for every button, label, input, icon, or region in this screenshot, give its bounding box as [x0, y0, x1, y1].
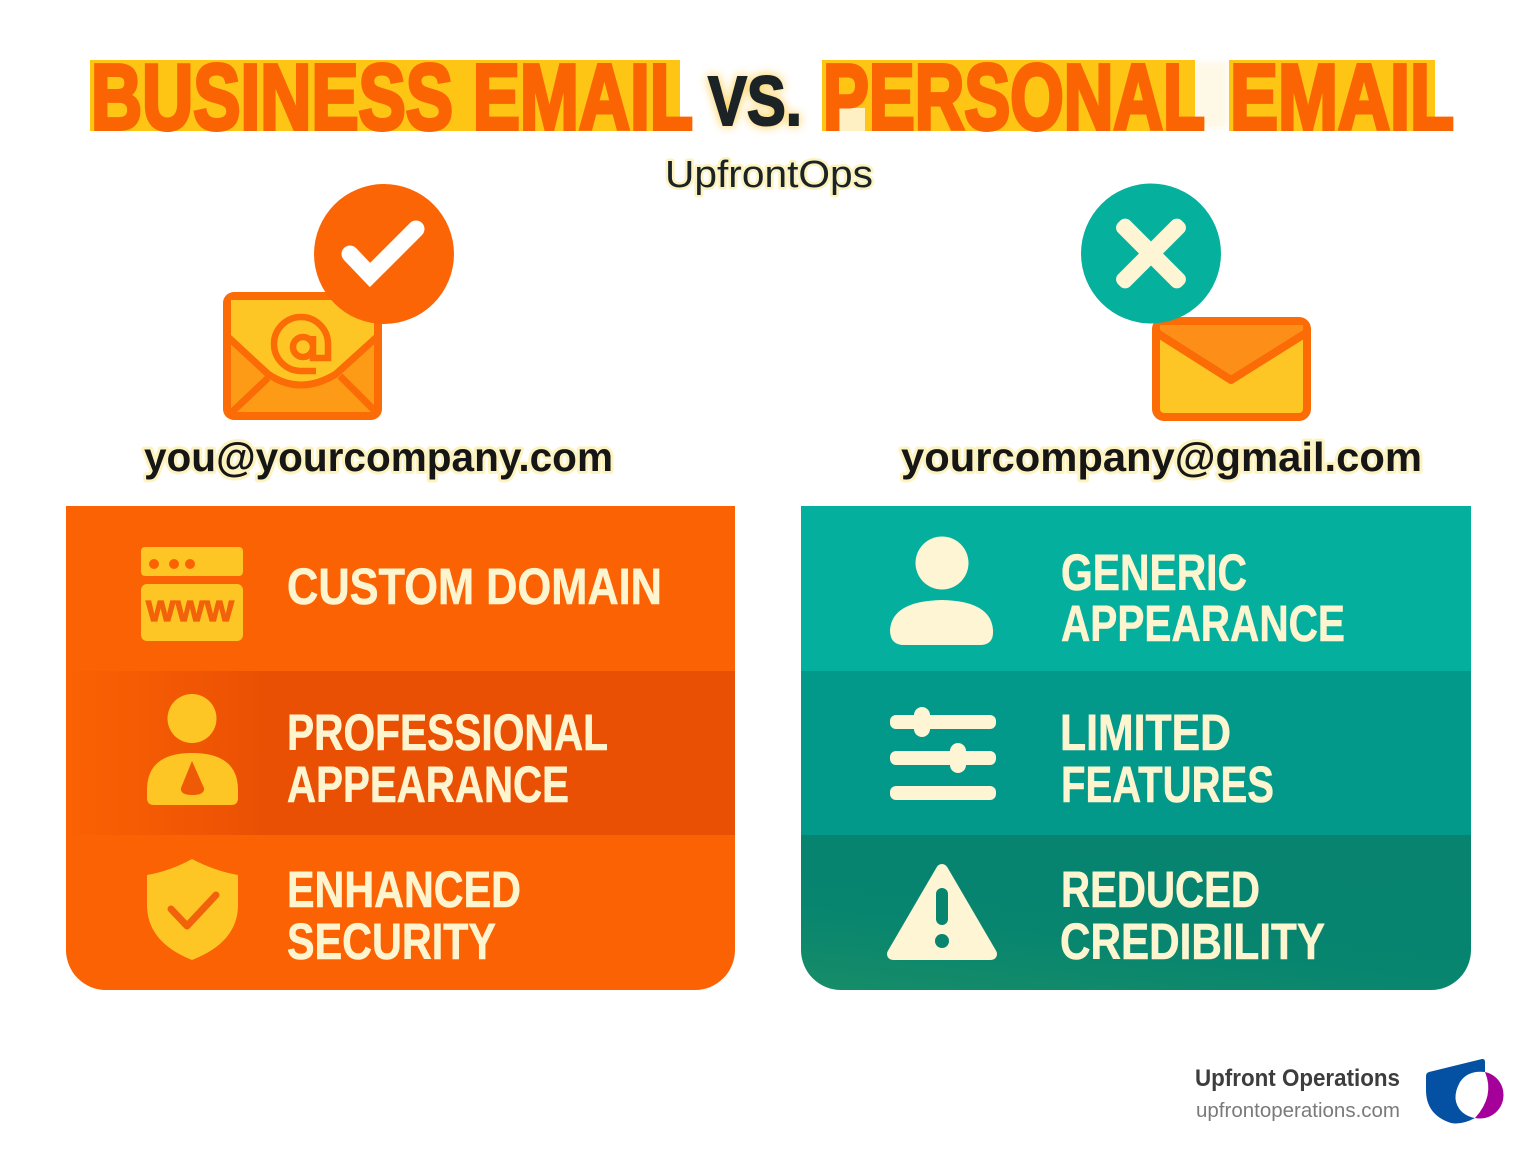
label: [1060, 704, 1274, 813]
label: APPEARANCE: [287, 756, 569, 813]
brand url: upfrontoperations.com: [1196, 1099, 1400, 1122]
label: CUSTOM DOMAIN: [287, 558, 662, 615]
title: personal email: PERSONAL: [823, 45, 1205, 149]
title: business email: BUSINESS EMAIL: [91, 45, 693, 149]
label: [1060, 861, 1325, 970]
footer: brand: [1195, 1059, 1504, 1123]
label: FEATURES: [1061, 756, 1274, 813]
panel background: [66, 506, 735, 990]
title: [90, 45, 1454, 149]
label: [287, 704, 608, 813]
brand name: Upfront Operations: [1195, 1065, 1400, 1092]
icon: professional person: [147, 694, 238, 805]
row: professional appearance: [147, 694, 608, 813]
label: APPEARANCE: [1061, 595, 1345, 652]
panel background: [801, 506, 1471, 990]
icon: www browser: WWW: [146, 596, 235, 628]
icon: generic person: [890, 536, 993, 645]
panel: personal email: [801, 506, 1471, 990]
row: limited features: [890, 704, 1274, 813]
label: LIMITED: [1060, 704, 1231, 761]
email: business address: you@yourcompany.com: [144, 434, 613, 480]
icon: personal envelope with cross: [1081, 184, 1311, 421]
title: personal email: EMAIL: [1230, 45, 1454, 149]
row: reduced credibility: [893, 861, 1325, 970]
label: SECURITY: [287, 913, 496, 970]
label: PROFESSIONAL: [287, 704, 608, 761]
icon: sliders: [890, 707, 996, 800]
label: CREDIBILITY: [1060, 913, 1325, 970]
icon: shield: [147, 859, 238, 960]
at sign: [274, 317, 328, 371]
row: custom domain: [141, 547, 662, 641]
panel: business email: [66, 506, 735, 990]
icon: warning triangle: [893, 870, 991, 954]
icon: business envelope with check: [223, 184, 454, 420]
row: generic appearance: [890, 536, 1345, 652]
envelope: [223, 292, 382, 420]
icon: logo: [1426, 1059, 1504, 1123]
label: ENHANCED: [287, 861, 521, 918]
label: [287, 861, 521, 970]
email: personal address: yourcompany@gmail.com: [901, 434, 1422, 480]
icon: www browser: [141, 547, 243, 641]
label: REDUCED: [1061, 861, 1260, 918]
check badge: [314, 184, 454, 324]
subtitle: UpfrontOps: UpfrontOps: [665, 154, 873, 196]
title: vs: VS.: [708, 62, 802, 140]
envelope: [1152, 317, 1311, 421]
cross badge: [1081, 184, 1221, 324]
label: GENERIC: [1061, 544, 1247, 601]
label: [1061, 544, 1345, 652]
row: enhanced security: [147, 859, 521, 970]
